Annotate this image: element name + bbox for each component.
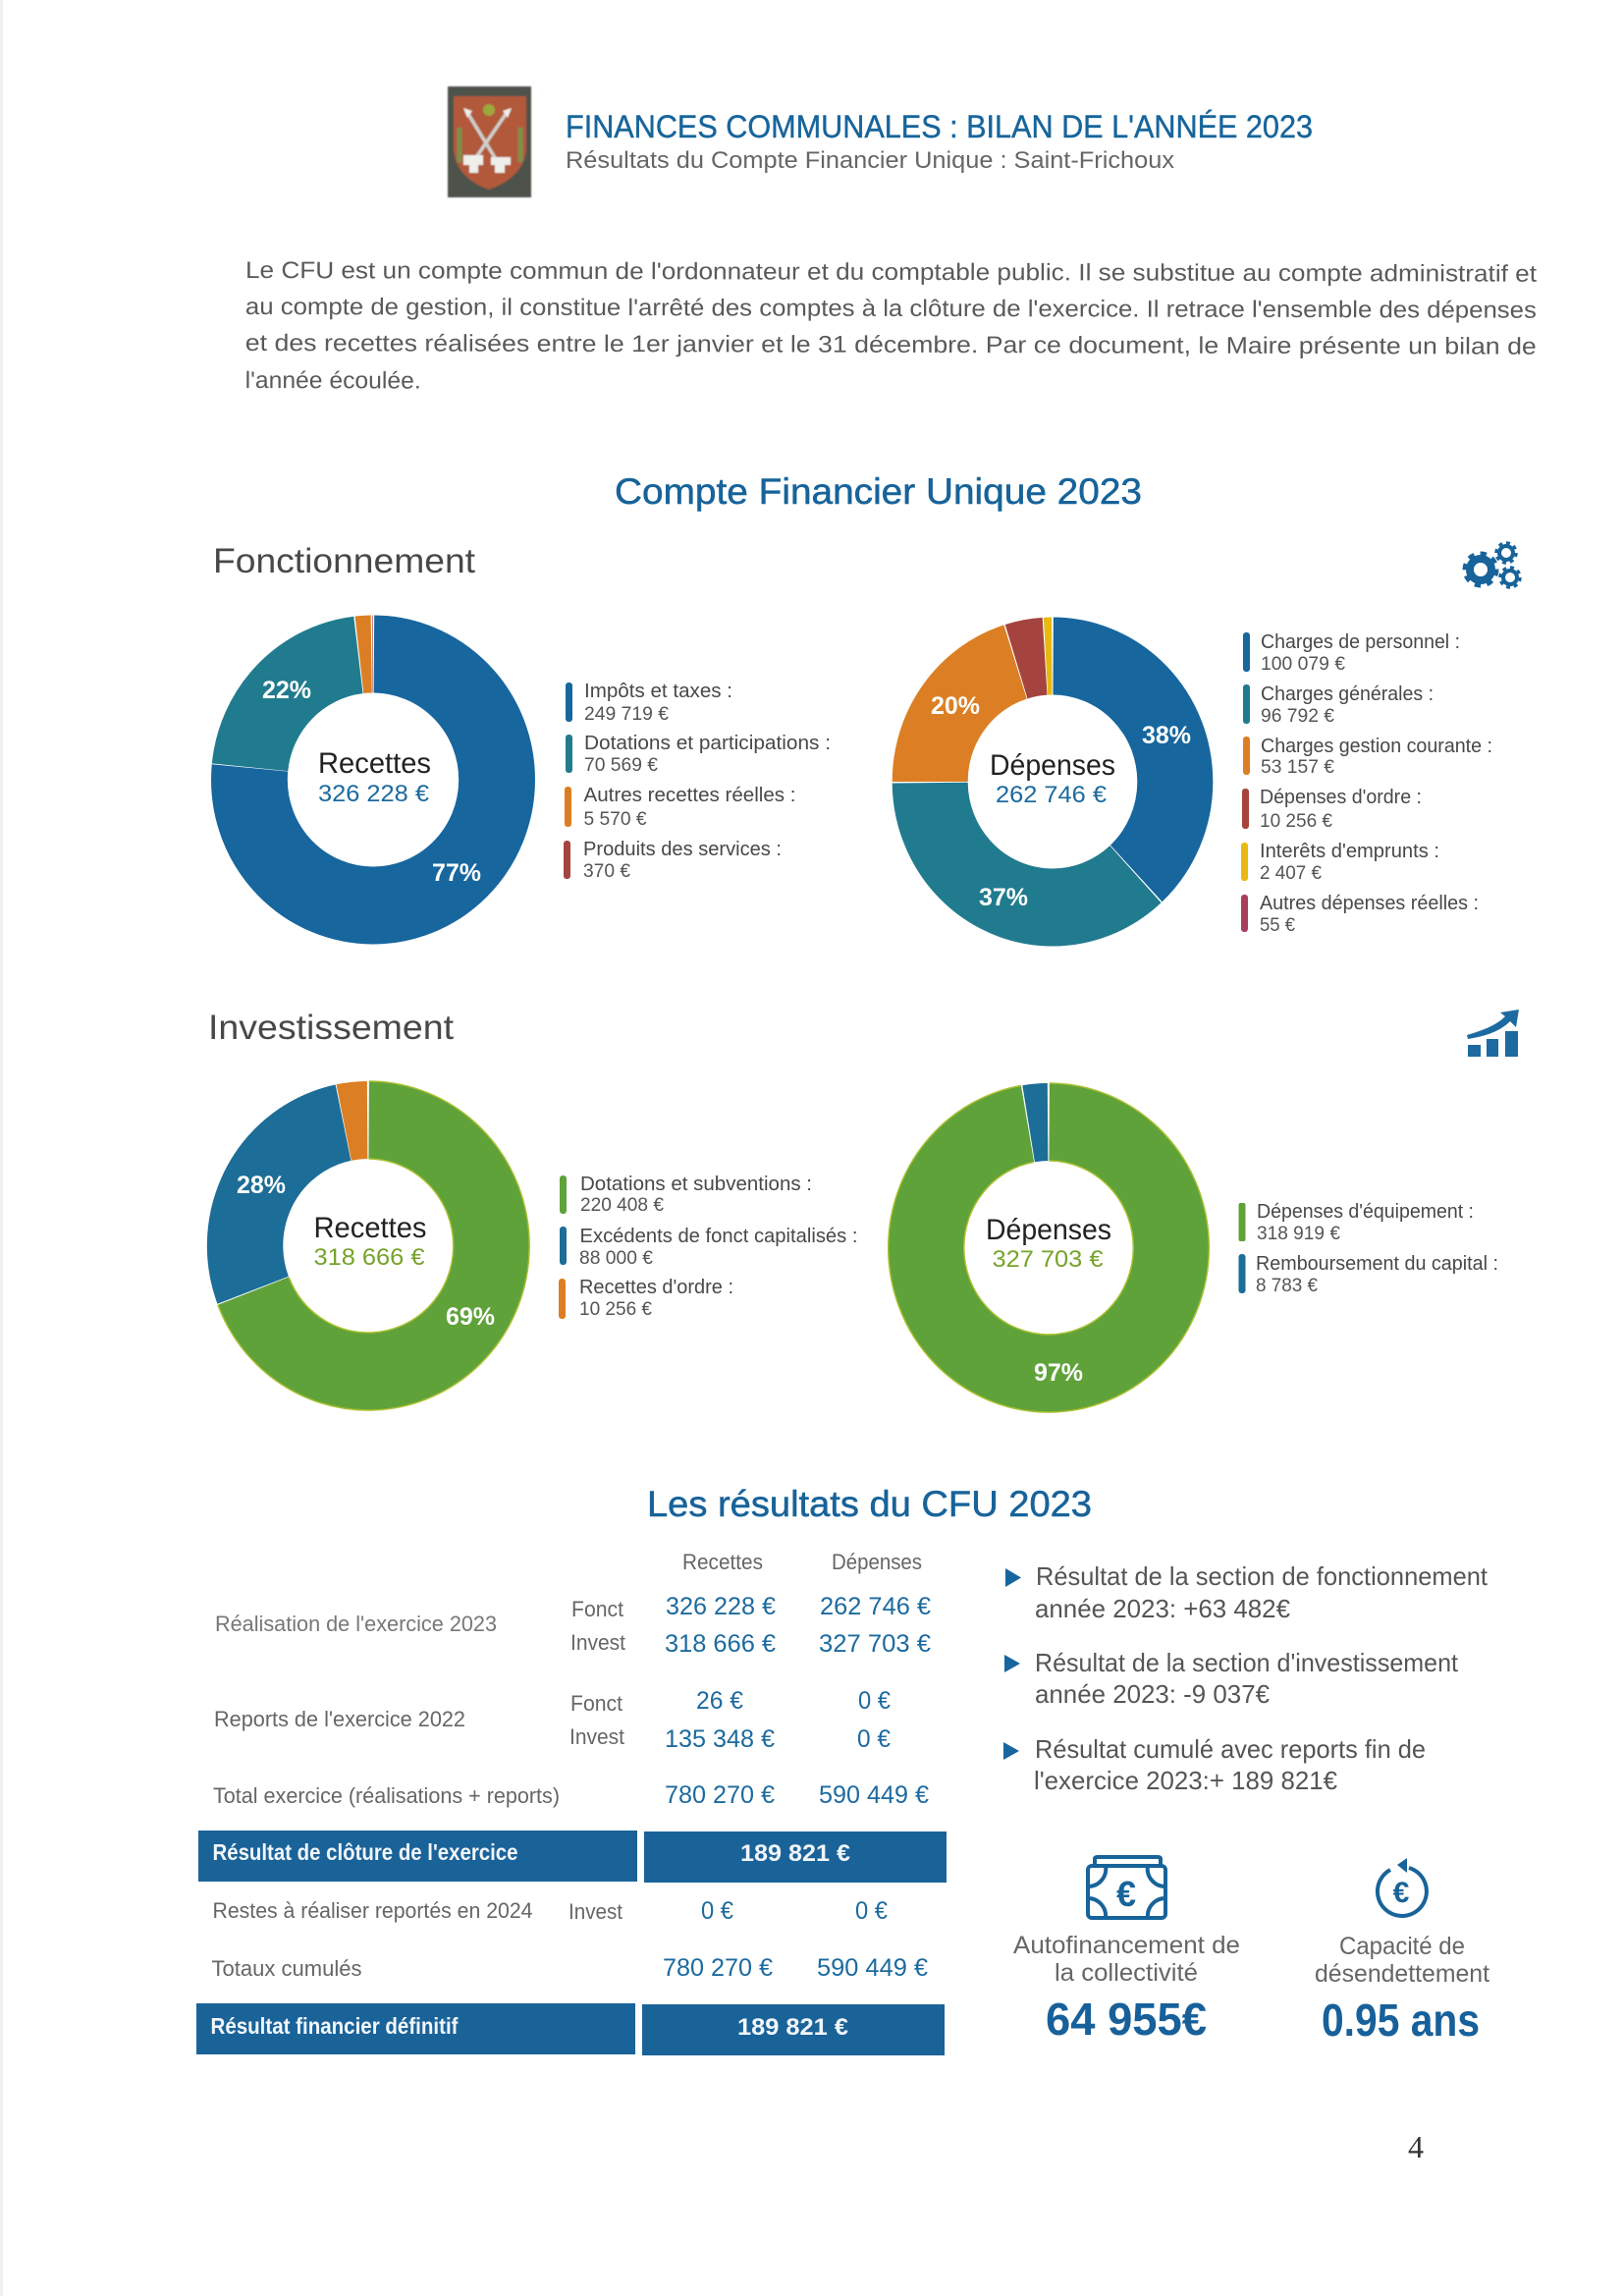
row: résultat financier définitif: 189 821 € <box>737 2014 848 2041</box>
row: totaux cumulés: 780 270 € <box>663 1954 773 1982</box>
heading: Fonctionnement: Fonctionnement <box>213 542 475 580</box>
value label: 28%: 28% <box>237 1172 286 1199</box>
center label: 327 703 € <box>992 1246 1104 1273</box>
legend item: produits des services <box>564 839 782 882</box>
legend item: charges générales <box>1243 683 1434 727</box>
legend item: charges de personnel <box>1243 631 1460 675</box>
row: résultat de clôture: Résultat de clôture de l'exercice <box>212 1839 518 1865</box>
row: restes à réaliser: 0 € <box>855 1897 888 1925</box>
donut chart: investissement dépenses <box>888 1082 1210 1413</box>
legend item: autres recettes réelles: Autres recettes réelles : <box>583 785 795 806</box>
row: réalisation de l'exercice 2023 <box>215 1593 931 1658</box>
center label: 326 228 € <box>318 781 430 807</box>
legend item: dotations et subventions: 220 408 € <box>580 1195 664 1216</box>
legend item: produits des services: Produits des services : <box>583 839 782 860</box>
icon: rising bar chart with arrow <box>1467 1010 1519 1057</box>
legend item: produits des services: 370 € <box>583 861 630 882</box>
row: réalisation de l'exercice 2023: 326 228 € <box>666 1593 776 1620</box>
row: réalisation de l'exercice 2023: Fonct <box>571 1597 623 1621</box>
row: résultat financier définitif <box>196 2003 945 2055</box>
bullet: résultat cumulé <box>1003 1734 1426 1795</box>
intro paragraph <box>245 257 1537 398</box>
bullet: investissement: année 2023: -9 037€ <box>1035 1679 1271 1709</box>
label <box>1315 1933 1489 1988</box>
legend item: intérêts d'emprunts: Interêts d'emprunts : <box>1260 841 1439 862</box>
bullet: fonctionnement: Résultat de la section de fonctionnement <box>1036 1561 1489 1591</box>
row: total exercice: 590 449 € <box>819 1781 929 1809</box>
header: crest and title <box>448 86 1313 197</box>
column headers: Dépenses <box>832 1550 922 1574</box>
center label: Recettes <box>314 1212 426 1244</box>
legend item: charges de personnel: Charges de personnel : <box>1261 631 1460 653</box>
legend item: recettes d'ordre <box>559 1277 733 1320</box>
row: reports de l'exercice 2022: Invest <box>569 1724 624 1749</box>
center label: Dépenses <box>986 1214 1111 1246</box>
row: restes à réaliser <box>212 1897 888 1925</box>
icon: municipal crest <box>448 86 531 197</box>
legend item: intérêts d'emprunts <box>1241 841 1439 884</box>
row: réalisation de l'exercice 2023: 262 746 € <box>820 1593 931 1620</box>
legend item: excédents de fonct capitalisés: Excédents de fonct capitalisés : <box>579 1226 858 1247</box>
legend item: remboursement du capital: Remboursement du capital : <box>1256 1253 1498 1275</box>
legend item: dépenses d'équipement: 318 919 € <box>1257 1224 1340 1244</box>
legend item: charges générales: 96 792 € <box>1261 706 1334 727</box>
label <box>1013 1932 1240 1987</box>
intro paragraph: l'année écoulée. <box>245 367 421 394</box>
main title: FINANCES COMMUNALES : BILAN DE L'ANNÉE 2023 <box>566 109 1313 144</box>
legend item: charges gestion courante: Charges gestion courante : <box>1261 736 1492 757</box>
legend item: intérêts d'emprunts: 2 407 € <box>1260 863 1322 884</box>
column headers <box>682 1550 922 1574</box>
intro paragraph: au compte de gestion, il constitue l'arrêté des comptes à la clôture de l'exercice. Il retrace l'ensemble des dépenses <box>245 294 1537 324</box>
value label: 77%: 77% <box>432 859 481 887</box>
value label: 69%: 69% <box>446 1303 495 1331</box>
bullet: fonctionnement: année 2023: +63 482€ <box>1035 1594 1291 1623</box>
value label: 97%: 97% <box>1034 1359 1083 1387</box>
legend item: autres dépenses réelles: 55 € <box>1260 915 1295 936</box>
bullet: résultat cumulé: l'exercice 2023:+ 189 821€ <box>1034 1766 1338 1795</box>
legend item: dotations et subventions <box>560 1174 812 1216</box>
center label: 318 666 € <box>314 1244 425 1271</box>
legend item: recettes d'ordre: 10 256 € <box>579 1299 652 1320</box>
legend: investissement dépenses <box>1239 1201 1498 1296</box>
row: réalisation de l'exercice 2023: Invest <box>570 1630 625 1655</box>
label: Autofinancement de <box>1013 1932 1240 1959</box>
row: résultat de clôture <box>198 1831 947 1883</box>
legend item: dotations et participations <box>566 733 831 776</box>
intro paragraph: et des recettes réalisées entre le 1er janvier et le 31 décembre. Par ce document, le Maire présente un bilan de <box>245 330 1537 360</box>
value label: 20%: 20% <box>931 692 980 720</box>
icon: banknote: € <box>1116 1874 1136 1914</box>
legend item: dépenses d'équipement <box>1239 1201 1474 1244</box>
row: restes à réaliser: Restes à réaliser reportés en 2024 <box>212 1898 532 1923</box>
center label: Dépenses <box>990 749 1115 782</box>
row: total exercice <box>213 1781 929 1809</box>
bullet: investissement: Résultat de la section d'investissement <box>1035 1648 1459 1677</box>
key figure: capacité de désendettement <box>1315 1858 1489 2046</box>
legend item: charges générales: Charges générales : <box>1261 683 1434 705</box>
bullet: résultat cumulé: Résultat cumulé avec reports fin de <box>1035 1734 1426 1764</box>
bullet: fonctionnement <box>1005 1561 1489 1623</box>
legend item: autres dépenses réelles: Autres dépenses réelles : <box>1260 893 1479 914</box>
legend item: dépenses d'ordre: Dépenses d'ordre : <box>1260 787 1422 808</box>
legend item: dépenses d'équipement: Dépenses d'équipement : <box>1257 1201 1474 1223</box>
center label <box>314 1212 426 1271</box>
legend item: recettes d'ordre: Recettes d'ordre : <box>579 1277 733 1298</box>
label: la collectivité <box>1055 1959 1198 1987</box>
row: restes à réaliser: 0 € <box>701 1897 733 1925</box>
value label: 38%: 38% <box>1142 722 1191 749</box>
row: reports de l'exercice 2022: 135 348 € <box>665 1725 775 1753</box>
legend item: impôts et taxes: Impôts et taxes : <box>584 681 732 702</box>
legend item: remboursement du capital: 8 783 € <box>1256 1276 1318 1296</box>
row: total exercice: 780 270 € <box>665 1781 775 1809</box>
center label <box>318 747 431 807</box>
legend: investissement recettes <box>559 1174 858 1320</box>
center label: Recettes <box>318 747 431 780</box>
bullet: investissement <box>1004 1648 1459 1709</box>
legend item: charges gestion courante <box>1243 736 1492 778</box>
label: désendettement <box>1315 1960 1489 1988</box>
row: résultat de clôture: 189 821 € <box>740 1840 850 1867</box>
legend item: dotations et participations: Dotations et participations : <box>584 733 831 754</box>
legend item: dépenses d'ordre <box>1242 787 1422 832</box>
row: réalisation de l'exercice 2023: Réalisation de l'exercice 2023 <box>215 1612 497 1636</box>
intro paragraph: Le CFU est un compte commun de l'ordonnateur et du comptable public. Il se substitue au compte administratif et <box>245 257 1537 288</box>
icon: gears <box>1465 543 1520 587</box>
row: total exercice: Total exercice (réalisations + reports) <box>213 1783 560 1808</box>
legend item: dotations et subventions: Dotations et subventions : <box>580 1174 812 1195</box>
legend item: autres dépenses réelles <box>1241 893 1479 936</box>
column headers: Recettes <box>682 1550 763 1574</box>
section title: Les résultats du CFU: Les résultats du CFU 2023 <box>647 1484 1092 1524</box>
row: résultat financier définitif: Résultat financier définitif <box>210 2013 459 2039</box>
row: reports de l'exercice 2022: 0 € <box>858 1687 891 1715</box>
legend item: excédents de fonct capitalisés: 88 000 € <box>579 1248 653 1269</box>
legend item: remboursement du capital <box>1239 1253 1498 1296</box>
legend item: dotations et participations: 70 569 € <box>584 755 658 776</box>
value: 64 955€ <box>1046 1994 1207 2045</box>
row: reports de l'exercice 2022: Reports de l'exercice 2022 <box>214 1707 465 1731</box>
row: totaux cumulés <box>212 1954 928 1982</box>
legend: fonctionnement recettes <box>564 681 831 882</box>
row: reports de l'exercice 2022 <box>214 1687 891 1753</box>
donut chart: investissement recettes <box>206 1080 530 1411</box>
row: restes à réaliser: Invest <box>568 1899 623 1924</box>
label: Capacité de <box>1339 1933 1465 1960</box>
section title: Compte Financier Unique: Compte Financier Unique 2023 <box>615 471 1142 512</box>
icon: euro with circular arrow <box>1378 1858 1427 1916</box>
row: totaux cumulés: Totaux cumulés <box>212 1956 361 1981</box>
icon: euro with circular arrow: € <box>1393 1877 1410 1909</box>
heading: Investissement: Investissement <box>208 1009 454 1047</box>
row: réalisation de l'exercice 2023: 327 703 € <box>819 1630 931 1658</box>
donut chart: fonctionnement dépenses <box>880 604 1225 959</box>
value label: 22%: 22% <box>262 677 311 704</box>
value label: 37%: 37% <box>979 884 1028 911</box>
legend item: impôts et taxes: 249 719 € <box>584 704 669 725</box>
subtitle: Résultats du Compte Financier Unique : Saint-Frichoux <box>566 147 1174 174</box>
row: reports de l'exercice 2022: 26 € <box>696 1687 743 1715</box>
legend item: charges gestion courante: 53 157 € <box>1261 757 1334 778</box>
legend item: excédents de fonct capitalisés <box>560 1226 858 1269</box>
results table <box>196 1550 947 2055</box>
legend: fonctionnement dépenses <box>1241 631 1492 936</box>
legend item: charges de personnel: 100 079 € <box>1261 654 1345 675</box>
legend item: autres recettes réelles: 5 570 € <box>583 809 647 830</box>
page number: 4 <box>1408 2129 1424 2164</box>
center label: 262 746 € <box>996 782 1108 808</box>
legend item: dépenses d'ordre: 10 256 € <box>1260 811 1332 832</box>
donut chart: fonctionnement recettes <box>237 641 510 918</box>
row: totaux cumulés: 590 449 € <box>817 1954 928 1982</box>
value: 0.95 ans <box>1322 1995 1480 2046</box>
row: reports de l'exercice 2022: 0 € <box>857 1725 891 1753</box>
legend item: autres recettes réelles <box>565 785 795 830</box>
icon: banknote <box>1088 1857 1165 1918</box>
row: reports de l'exercice 2022: Fonct <box>570 1691 623 1716</box>
row: réalisation de l'exercice 2023: 318 666 € <box>665 1630 776 1658</box>
key figure: autofinancement <box>1013 1857 1240 2045</box>
legend item: impôts et taxes <box>566 681 732 725</box>
center label <box>986 1214 1111 1273</box>
center label <box>990 749 1115 808</box>
bullet list: section results <box>1003 1561 1489 1795</box>
